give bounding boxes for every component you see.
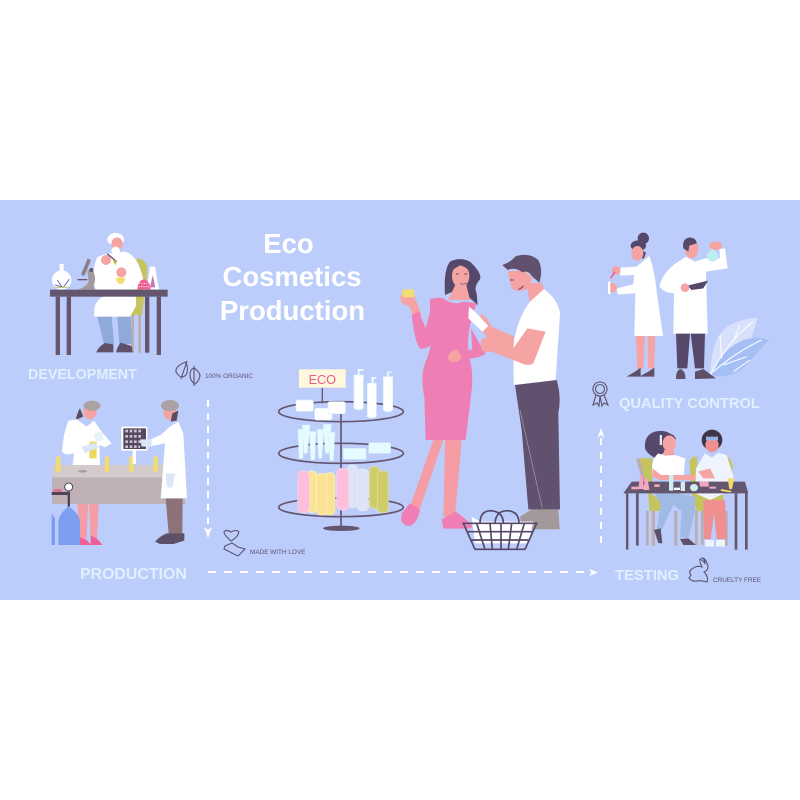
scene: woman and man shopping [400,255,560,549]
label: development: DEVELOPMENT [28,367,137,383]
woman in patterned blouse [695,430,734,547]
title: Cosmetics [222,261,362,292]
scene: development [50,233,168,355]
arrow: production flow down [204,400,212,538]
label: production: PRODUCTION [80,566,187,583]
table [52,477,185,504]
chair [130,258,147,353]
man scientist [659,237,728,379]
leaves [710,318,769,376]
text: cruelty free: CRUELTY FREE [713,577,761,584]
flask with lavender [52,264,71,290]
title: Production [220,295,365,326]
tablet [121,427,147,464]
man worker [140,400,187,544]
flask and flower bowl [137,267,159,289]
scientist [93,233,144,352]
table with cosmetics [623,475,748,550]
table [50,290,168,355]
arrow: flow up [598,428,604,543]
title [220,228,365,326]
scene: quality control [608,233,769,379]
eco sign: ECO [309,373,336,387]
icon: leaves [176,361,200,386]
woman worker [62,401,112,465]
bottles [56,457,158,472]
man [468,255,560,529]
microscope [77,259,95,290]
bottom shelf products [298,465,388,515]
chairs [636,456,733,546]
arrow: flow right [208,569,598,576]
background band [0,200,800,600]
top shelf products [296,369,393,420]
scene: production [52,400,187,545]
text: 100% organic: 100% ORGANIC [205,373,253,380]
shopping basket [463,511,537,549]
text: made with love: MADE WITH LOVE [250,549,305,556]
eco sign [299,369,346,403]
scene: product shelf [279,369,403,531]
label: testing: TESTING [615,568,679,584]
table top [52,465,167,477]
scene: testing [623,430,748,550]
icon: rabbit [689,558,708,582]
icon: heart in hand [224,530,245,556]
stand base [323,526,360,531]
icon: award ribbon [593,382,608,406]
middle shelf products [298,424,391,461]
shelf rings and stand [279,402,403,527]
woman worker legs [77,504,103,545]
gas cylinder with gauge [52,483,80,545]
label: quality control: QUALITY CONTROL [619,396,760,412]
woman [400,259,486,529]
woman scientist [608,233,663,377]
title: Eco [263,228,314,259]
woman in white shirt [645,431,700,545]
